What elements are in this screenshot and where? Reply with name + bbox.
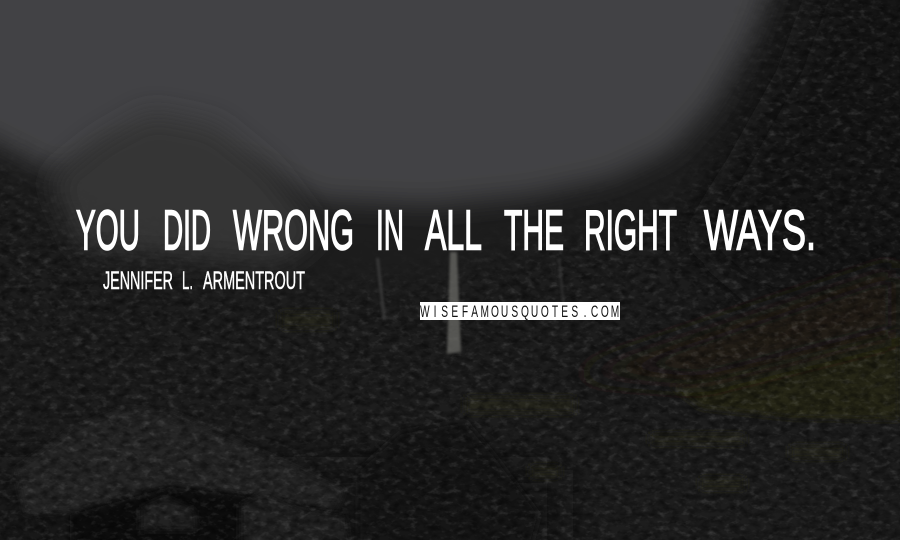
foggy left hill (50, 112, 320, 265)
title: quote: RIGHT (584, 198, 677, 262)
author name: JENNIFER (103, 267, 173, 295)
title: quote: THE (504, 198, 564, 262)
grass patches (280, 312, 845, 489)
title: quote (76, 198, 816, 262)
large boulder left (15, 408, 345, 515)
small boulders (140, 497, 197, 530)
title: quote: IN (376, 198, 404, 262)
right cliff shade (690, 0, 900, 300)
title: quote: YOU (76, 198, 140, 262)
title: quote: DID (163, 198, 211, 262)
title: quote: ALL (425, 198, 482, 262)
author name (103, 267, 305, 295)
boulder shadow (70, 487, 345, 540)
title: quote: WRONG (233, 198, 354, 262)
lower foreground shade (0, 470, 560, 540)
title: quote: WAYS. (704, 198, 816, 262)
author name: ARMENTROUT (203, 267, 305, 295)
author name: L. (182, 267, 193, 295)
large boulder centre (358, 420, 540, 540)
watermark badge: WISEFAMOUSQUOTES.COM (420, 301, 619, 321)
misty sky (0, 0, 790, 205)
right grassy slope (670, 330, 900, 420)
waterfall (447, 252, 461, 354)
